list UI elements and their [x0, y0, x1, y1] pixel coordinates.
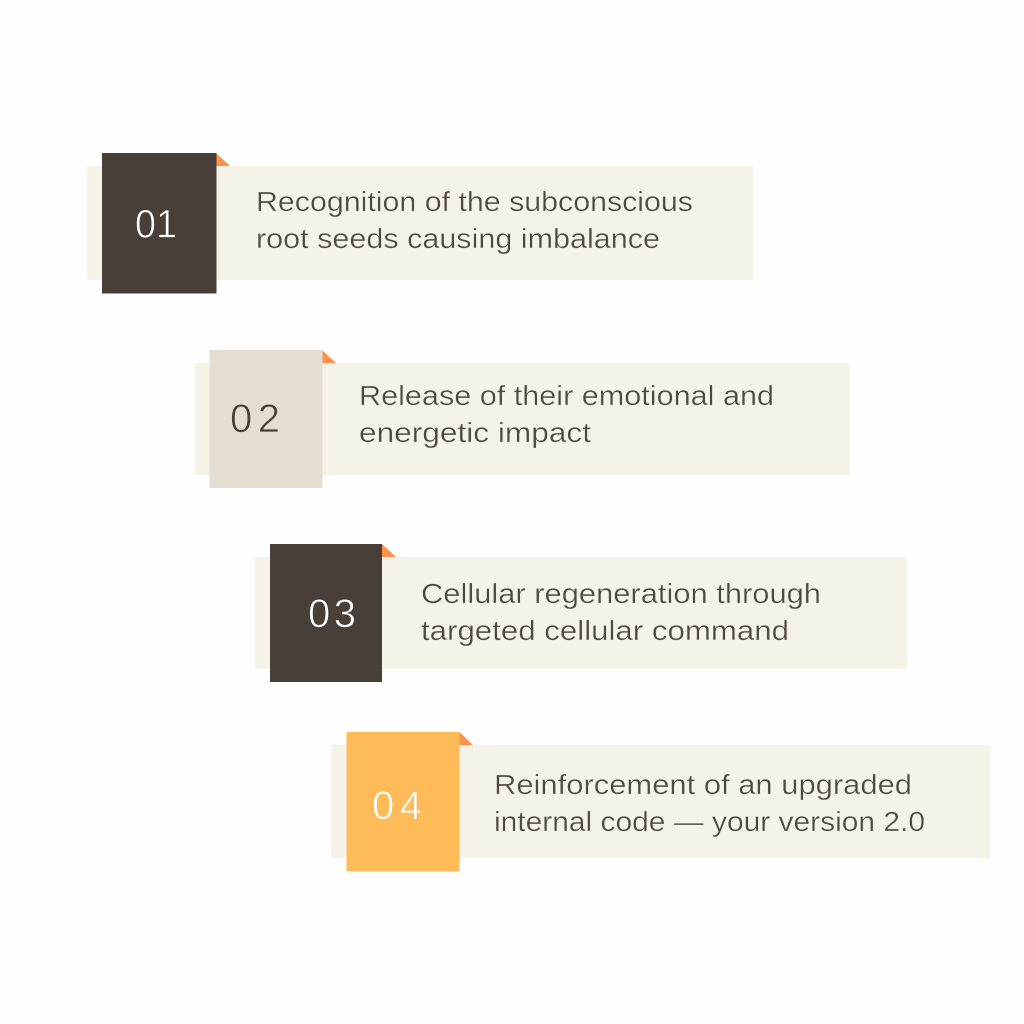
- step 03 text: Cellular regeneration through: [421, 578, 821, 609]
- step 01 number: 01: [135, 202, 177, 246]
- step 01 text: Recognition of the subconscious: [256, 186, 693, 217]
- panel: step 01: [87, 153, 753, 294]
- step 03 text: targeted cellular command: [421, 615, 789, 646]
- panel: step 03: [255, 544, 907, 682]
- step 02 number block: [210, 350, 322, 488]
- step 02 corner fold: [322, 350, 336, 363]
- step 03 text band: [255, 557, 907, 669]
- step 04 text band: [332, 745, 990, 858]
- step 01 text band: [87, 166, 753, 280]
- step 01 number block: [102, 153, 216, 294]
- step 02 number: 02: [230, 397, 280, 441]
- step 04 text: Reinforcement of an upgraded: [494, 769, 912, 800]
- step 01 corner fold: [216, 153, 230, 166]
- step 04 number block: [346, 732, 460, 872]
- panel: step 02: [195, 350, 850, 488]
- step 04 corner fold: [460, 732, 473, 745]
- step 02 text: Release of their emotional and: [359, 380, 774, 411]
- step 03 number block: [270, 544, 382, 682]
- step 01 text: root seeds causing imbalance: [256, 223, 660, 254]
- step 03 corner fold: [382, 544, 396, 557]
- panel: step 04: [332, 732, 990, 872]
- step 04 text: internal code — your version 2.0: [494, 806, 925, 837]
- step 02 text band: [195, 363, 850, 475]
- step 02 text: energetic impact: [359, 417, 591, 448]
- step 03 number: 03: [308, 592, 356, 636]
- step 04 number: 04: [372, 784, 422, 828]
